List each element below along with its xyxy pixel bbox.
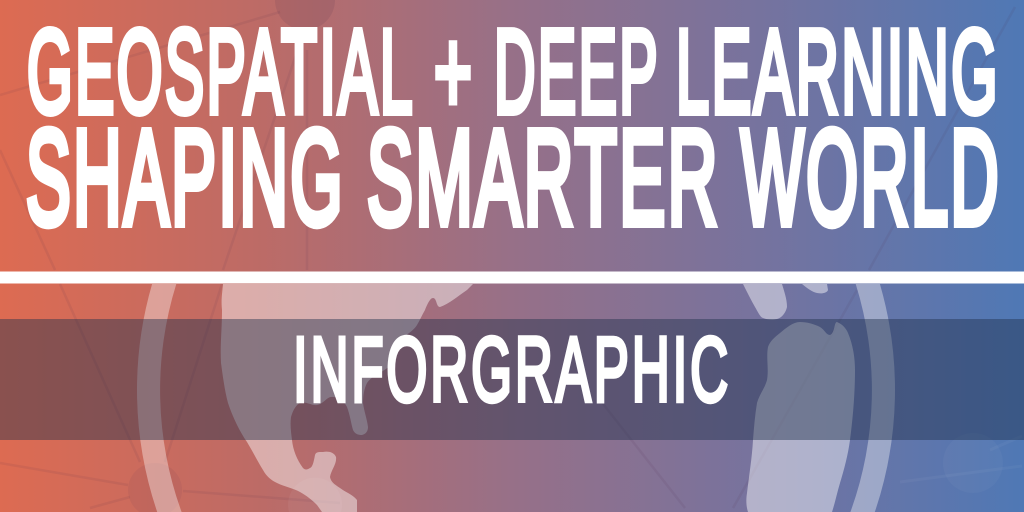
title line 2: SHAPING <box>26 102 345 253</box>
title line 1: GEOSPATIAL <box>27 6 415 138</box>
globe <box>137 284 895 512</box>
globe ring <box>137 284 895 512</box>
title line 1: DEEP <box>494 6 660 138</box>
title line 1: + <box>434 6 472 138</box>
continent: north america <box>221 284 473 512</box>
continent: main landmass <box>746 322 855 512</box>
title line 2 <box>26 102 1001 253</box>
white divider bar <box>0 272 1024 284</box>
dark band <box>0 319 1024 440</box>
continent: small landmass <box>802 284 828 293</box>
continent: upper landmass <box>743 284 787 320</box>
